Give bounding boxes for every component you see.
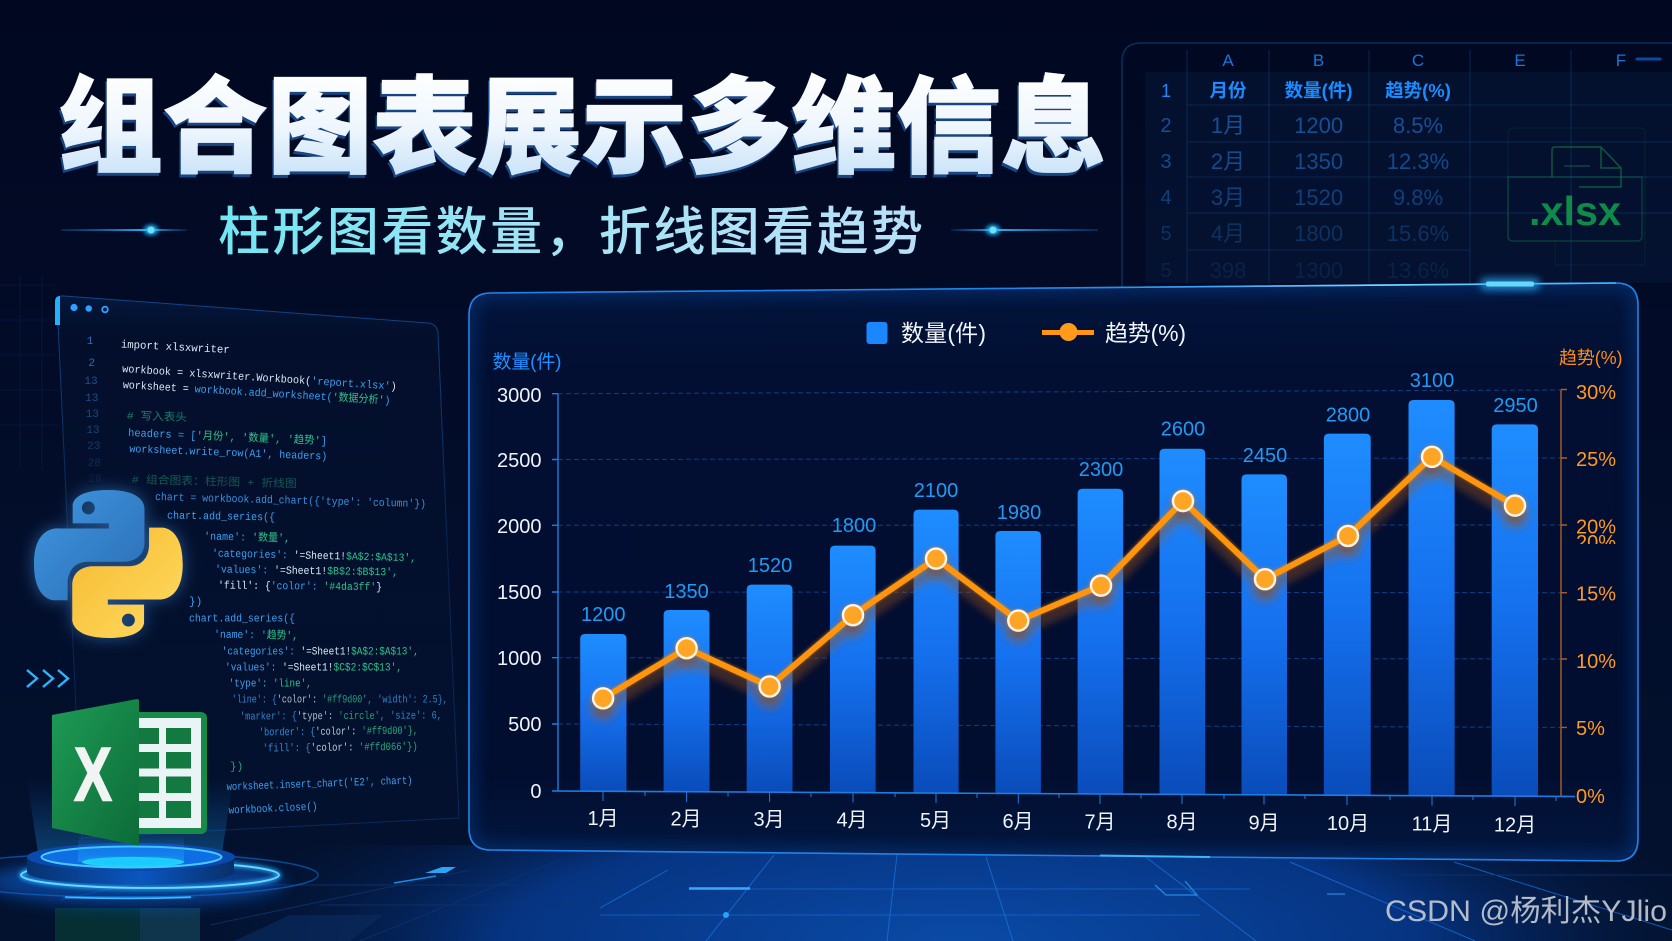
code text: 'fill': {'color': '#4da3ff'} [218, 581, 382, 594]
gridlines [558, 390, 1561, 727]
bar value labels: 3100 [1410, 370, 1454, 392]
trend markers [593, 447, 1525, 708]
data rows: 1350 [1294, 149, 1343, 174]
bar value labels: 1800 [832, 515, 876, 537]
month labels: 3月 [753, 809, 785, 831]
header row: 趋势(%) [1385, 80, 1451, 101]
title: 组合图表展示多维信息 [58, 70, 1106, 187]
code text: 'line': {'color': '#ff9d00', 'width': 2.5}, [232, 694, 448, 706]
panel: combo chart [469, 278, 1638, 861]
trend line [593, 447, 1525, 708]
month labels: 12月 [1494, 814, 1536, 836]
bar value labels [581, 370, 1538, 626]
month labels: 9月 [1248, 812, 1280, 834]
line numbers: 2 [88, 358, 95, 370]
floor glow and perspective grid [0, 845, 1672, 941]
code text: workbook = xlsxwriter.Workbook('report.xlsx') [122, 364, 397, 394]
disc [27, 857, 234, 884]
subtitle decoration: right [951, 225, 1098, 235]
code text: 'fill': {'color': '#ffd066'}) [263, 742, 418, 755]
data rows: 1300 [1294, 258, 1343, 283]
base glow [0, 858, 285, 906]
header row [1161, 80, 1451, 101]
window buttons [70, 304, 108, 312]
data rows: 1月 [1211, 113, 1245, 138]
code text: }) [230, 762, 243, 774]
month labels: 7月 [1084, 812, 1116, 834]
left axis: 2500 [497, 450, 542, 472]
data rows: 398 [1210, 258, 1246, 283]
month labels: 6月 [1002, 811, 1034, 833]
data rows: 4月 [1211, 221, 1245, 246]
month labels: 10月 [1327, 813, 1369, 835]
line numbers: 1 [87, 336, 94, 348]
axis titles: 数量(件) [492, 351, 562, 373]
column letters: F [1616, 51, 1626, 70]
month labels: 4月 [836, 810, 868, 832]
bar value labels: 2450 [1243, 445, 1287, 467]
icon: arrows [27, 670, 68, 687]
line numbers: 23 [87, 441, 100, 453]
header row: 月份 [1209, 80, 1247, 101]
right axis: 25% [1576, 449, 1616, 471]
bar value labels: 1350 [664, 581, 709, 603]
bar value labels: 2950 [1493, 395, 1538, 417]
code text: headers = ['月份', '数量', '趋势'] [128, 426, 327, 448]
code text: workbook.close() [228, 801, 318, 817]
watermark: CSDN @杨利杰YJlio [1385, 895, 1667, 928]
legend: 趋势(%) [1105, 320, 1186, 346]
month labels: 1月 [587, 808, 619, 830]
background spreadsheet panel [1122, 43, 1672, 290]
data rows: 13.6% [1387, 258, 1449, 283]
bar value labels: 2300 [1079, 459, 1123, 481]
data rows: 1520 [1294, 185, 1343, 210]
column letters [1222, 51, 1626, 70]
data rows: 8.5% [1393, 113, 1443, 138]
icon: xlsx file [1508, 128, 1645, 265]
legend [866, 320, 1186, 346]
subtitle: 柱形图看数量，折线图看趋势 [218, 204, 923, 262]
excel reflection [55, 908, 200, 941]
data rows: 2 [1160, 115, 1172, 137]
header row: 1 [1161, 81, 1171, 101]
month labels: 11月 [1412, 814, 1452, 836]
window accent bar [55, 296, 60, 325]
right axis: 5% [1576, 718, 1605, 740]
line numbers: 13 [86, 425, 100, 437]
data rows: 1800 [1294, 221, 1343, 246]
left axis: 3000 [497, 385, 542, 407]
icon: python logo [34, 490, 183, 638]
icon: holographic platform [0, 780, 318, 941]
code text: 'values': '=Sheet1!$B$2:$B$13', [215, 565, 398, 579]
data rows: 3 [1160, 151, 1172, 173]
faint building grid, left edge [0, 275, 60, 470]
left axis [497, 385, 558, 803]
.xlsx label: .xlsx [1529, 188, 1621, 234]
column letters: B [1313, 51, 1324, 70]
icon: excel logo [52, 699, 207, 846]
data rows: 4 [1160, 187, 1172, 209]
data rows: 2月 [1211, 149, 1245, 174]
bar value labels: 1200 [581, 604, 626, 626]
code text: 'categories': '=Sheet1!$A$2:$A$13', [222, 646, 419, 658]
icon: excel logo: X [74, 732, 112, 818]
code text: 'name': '趋势', [214, 628, 298, 643]
data rows: 1200 [1294, 113, 1343, 138]
bars [580, 400, 1538, 796]
code text: }) [189, 596, 202, 608]
line numbers: 13 [85, 393, 98, 405]
hologram beams [27, 780, 233, 853]
code text: import xlsxwriter [120, 340, 230, 357]
legend: 数量(件) [901, 320, 986, 346]
column letters: C [1412, 51, 1424, 70]
data rows: 15.6% [1387, 221, 1449, 246]
right axis: 10% [1576, 651, 1616, 673]
left axis: 1500 [497, 582, 542, 604]
line numbers: 13 [86, 409, 99, 421]
month labels: 8月 [1166, 812, 1198, 834]
code text [120, 340, 448, 817]
header row: 数量(件) [1285, 80, 1353, 101]
outer ring [0, 853, 318, 897]
data rows: 3月 [1211, 185, 1245, 210]
month labels: 5月 [920, 810, 951, 832]
right axis: 20% [1576, 516, 1616, 538]
line numbers: 28 [88, 474, 102, 486]
data rows: 12.3% [1387, 149, 1449, 174]
month labels: 2月 [670, 808, 702, 830]
axis titles: 趋势(%) [1559, 348, 1622, 368]
right axis: 20% [1576, 532, 1616, 554]
code text: chart.add_series({ [189, 614, 295, 626]
right axis: 0% [1576, 786, 1605, 808]
data rows: 9.8% [1393, 185, 1443, 210]
code text: chart.add_series({ [167, 511, 275, 524]
code text: 'categories': '=Sheet1!$A$2:$A$13', [212, 549, 416, 565]
line numbers: 28 [88, 458, 101, 470]
data rows: 5 [1160, 223, 1172, 245]
month labels [587, 808, 1536, 836]
code text: 'values': '=Sheet1!$C$2:$C$13', [225, 662, 402, 674]
bar value labels: 1520 [748, 555, 792, 577]
code text: worksheet = workbook.add_worksheet('数据分析') [122, 377, 391, 408]
left axis: 2000 [497, 516, 542, 538]
code text: 'type': 'line', [229, 678, 312, 690]
right axis: 30% [1576, 382, 1616, 404]
line numbers: 13 [84, 376, 98, 388]
bar value labels: 1980 [997, 502, 1041, 524]
code text: # 组合图表：柱形图 + 折线图 [132, 472, 297, 491]
code text: # 写入表头 [127, 408, 187, 425]
left axis: 500 [508, 714, 542, 736]
code text: 'marker': {'type': 'circle', 'size': 6, [240, 710, 442, 723]
data rows [1160, 113, 1449, 283]
data rows: 5 [1160, 260, 1172, 282]
code text: chart = workbook.add_chart({'type': 'column'}) [155, 492, 426, 511]
bar value labels: 2100 [914, 480, 958, 502]
panel: code window [55, 296, 459, 838]
glow ring [21, 862, 279, 888]
left axis: 1000 [497, 648, 542, 670]
code text: 'border': {'color': '#ff9d00'}, [259, 726, 418, 739]
column letters: A [1222, 51, 1234, 70]
right axis [1561, 382, 1616, 808]
code text: 'name': '数量', [204, 530, 290, 545]
code text: worksheet.write_row(A1', headers) [129, 444, 327, 464]
left axis: 0 [530, 781, 542, 803]
right axis: 15% [1576, 584, 1616, 606]
bar value labels: 2600 [1161, 418, 1205, 440]
top accent [1480, 278, 1540, 290]
column letters: E [1514, 51, 1526, 70]
bar value labels: 2800 [1326, 404, 1370, 426]
axis titles [492, 348, 1622, 373]
line numbers [84, 336, 102, 486]
x axis [552, 791, 1575, 836]
subtitle decoration: left [61, 225, 187, 235]
code text: worksheet.insert_chart('E2', chart) [226, 776, 413, 794]
